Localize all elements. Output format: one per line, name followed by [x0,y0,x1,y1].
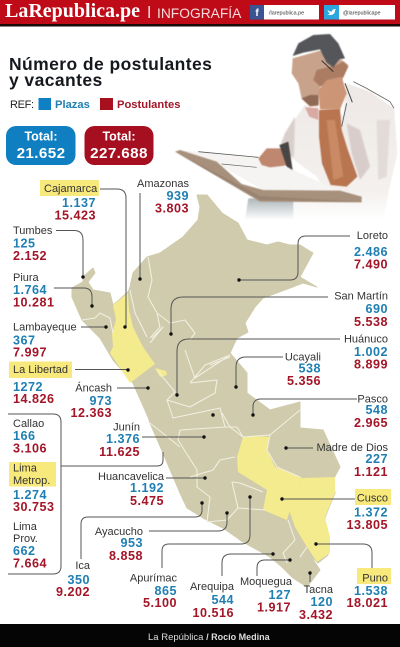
label: Callao: 166 [13,429,36,443]
label: Arequipa: 10.516 [192,606,234,620]
label: Junín: 11.625 [99,445,140,459]
label: Tacna: 120 [310,595,333,609]
label: Madre de Dios: 1.121 [354,465,388,479]
label: Tacna [299,571,334,622]
legend: Plazas [55,99,90,111]
label: Ica [56,501,204,599]
label: Lambayeque: Lambayeque [13,322,77,334]
twitter badge [324,5,395,20]
facebook badge: f [255,8,259,19]
map of Peru [72,195,340,587]
label: Puno: 1.538 [354,584,388,598]
label: Lambayeque [13,322,108,360]
label: San Martín: San Martín [334,290,388,302]
label: Cusco [280,489,391,532]
label: Tumbes: 125 [13,237,36,251]
label: San Martín: 690 [365,302,388,316]
label: Junín [99,422,206,459]
label: Moquegua: Moquegua [240,576,293,588]
label: Apurímac: Apurímac [130,573,177,585]
legend [10,98,180,111]
label: Lima Provincias: 662 [13,544,36,558]
face [292,51,348,107]
label: Cajamarca: 1.137 [62,196,96,210]
label: Amazonas: 939 [166,189,189,203]
label: Callao: Callao [13,418,44,430]
label: Piura: Piura [13,272,40,284]
label: Piura [13,272,94,310]
label: San Martín: 5.538 [354,315,388,329]
label: Puno: Puno [362,573,388,585]
region: Puno [288,477,335,562]
label: Callao [13,418,47,456]
label: Áncash [70,382,150,420]
title: Número de postulantes [9,54,212,74]
label: Lima Metropolitana: 30.753 [13,500,55,514]
label: Ayacucho [95,511,229,563]
total postulantes: Total: [102,130,136,144]
label: Piura: 1.764 [13,283,47,297]
label: La Libertad: 14.826 [13,392,55,406]
label: Lima Metropolitana [9,462,56,514]
label: Huancavelica: Huancavelica [98,471,165,483]
label: La Libertad [9,362,130,406]
label: Amazonas [137,178,189,281]
label: Moquegua: 127 [268,588,291,602]
label: Puno: 18.021 [346,596,388,610]
photo: man at drawing board [175,34,397,220]
facebook badge: /larepublica.pe [269,10,304,16]
label: Tacna: 3.432 [299,608,333,622]
logo: LaRepublica.pe [5,0,140,22]
label: Huánuco [175,334,388,397]
facebook badge [250,5,319,20]
label: Pasco: 2.965 [354,416,388,430]
footer [0,624,400,647]
label: Pasco [211,394,388,430]
label: Ucayali: 5.356 [287,374,321,388]
label: Ucayali [234,352,321,389]
label: Callao: 3.106 [13,442,47,456]
region: Cusco [237,436,303,520]
label: Tumbes [13,225,85,279]
country outline [72,195,340,587]
label: Cusco: 1.372 [354,506,388,520]
header band [0,0,400,26]
label: Lima Provincias [13,521,47,571]
label: Loreto: 2.486 [354,245,388,259]
label: Tumbes: Tumbes [13,225,53,237]
label: Pasco: Pasco [357,394,388,406]
label: Piura: 10.281 [13,296,55,310]
label: Lima Provincias: Lima [13,521,38,533]
label: Loreto: Loreto [357,230,388,242]
label: Lima Provincias: Prov. [13,533,38,545]
label: Lambayeque: 7.997 [13,346,47,360]
twitter badge: @larepublicape [343,10,381,16]
label: Apurímac: 5.100 [143,596,177,610]
label: Moquegua [240,558,293,615]
label: Lima Metropolitana: Metrop. [13,475,50,487]
writing hand [258,148,289,167]
label: Cajamarca: Cajamarca [44,183,98,195]
label: La Libertad: 1272 [13,380,43,394]
label: Ica: 9.202 [56,585,90,599]
label: Moquegua: 1.917 [257,601,291,615]
legend: REF: [10,99,34,111]
label: Cajamarca: 15.423 [54,208,96,222]
label: Arequipa: 544 [211,593,234,607]
footer: La República / Rocío Medina [148,632,271,643]
label: Huancavelica: 5.475 [130,494,164,508]
title [9,54,212,90]
title: y vacantes [9,70,103,90]
label: Huánuco: Huánuco [344,334,388,346]
label: Ayacucho: Ayacucho [95,526,143,538]
bracket: Callao and Lima [8,414,163,574]
label: Lima Provincias: 7.664 [13,557,47,571]
label: Apurímac [130,495,252,610]
label: Madre de Dios [284,442,388,479]
label: Huánuco: 1.002 [354,345,388,359]
label: Pasco: 548 [365,403,388,417]
section name: INFOGRAFÍA [157,5,242,21]
label: Lima Metropolitana: 1.274 [13,488,47,502]
label: Amazonas: 3.803 [155,202,189,216]
label: Arequipa: Arequipa [190,581,235,593]
label: Ayacucho: 953 [120,536,143,550]
label: Cusco: 13.805 [346,518,388,532]
label: Loreto: 7.490 [354,258,388,272]
label: Tacna: Tacna [304,584,334,596]
label: Loreto [237,230,388,282]
total plazas: Total: [24,130,58,144]
region: small La Libertad patch [155,368,167,377]
label: Arequipa [190,552,275,620]
label: Áncash: 12.363 [70,406,112,420]
total postulantes [84,126,154,165]
label: Áncash: Áncash [75,382,112,395]
label: Ucayali: Ucayali [285,352,321,364]
total postulantes: 227.688 [90,145,148,162]
total plazas [6,126,76,165]
label: Junín: 1.376 [106,432,140,446]
label: Ica: 350 [67,573,90,587]
hair [293,34,345,67]
region borders [82,257,307,563]
label: Cajamarca [40,180,127,329]
label: Huancavelica [98,471,207,508]
label: Áncash: 973 [89,394,112,408]
label: Madre de Dios: 227 [365,452,388,466]
legend: Postulantes [117,99,180,111]
label: Ica: Ica [75,560,91,572]
label: Madre de Dios: Madre de Dios [316,442,388,454]
label: Junín: Junín [113,422,140,434]
label: Lambayeque: 367 [13,333,36,347]
label: Apurímac: 865 [154,584,177,598]
hand [318,77,347,109]
label: Puno [314,542,391,610]
label: Cusco: Cusco [357,493,388,505]
total plazas: 21.652 [17,145,65,162]
label: Ayacucho: 8.858 [109,549,143,563]
label: San Martín [169,290,388,336]
region: Cajamarca and La Libertad [110,293,155,383]
label: Tumbes: 2.152 [13,249,47,263]
label: Lima Metropolitana: Lima [13,463,38,475]
label: Ucayali: 538 [298,362,321,376]
board [180,151,340,192]
label: La Libertad: La Libertad [13,364,68,376]
label: Huancavelica: 1.192 [130,481,164,495]
label: Amazonas: Amazonas [137,178,189,190]
label: Huánuco: 8.899 [354,358,388,372]
arm [319,108,357,187]
